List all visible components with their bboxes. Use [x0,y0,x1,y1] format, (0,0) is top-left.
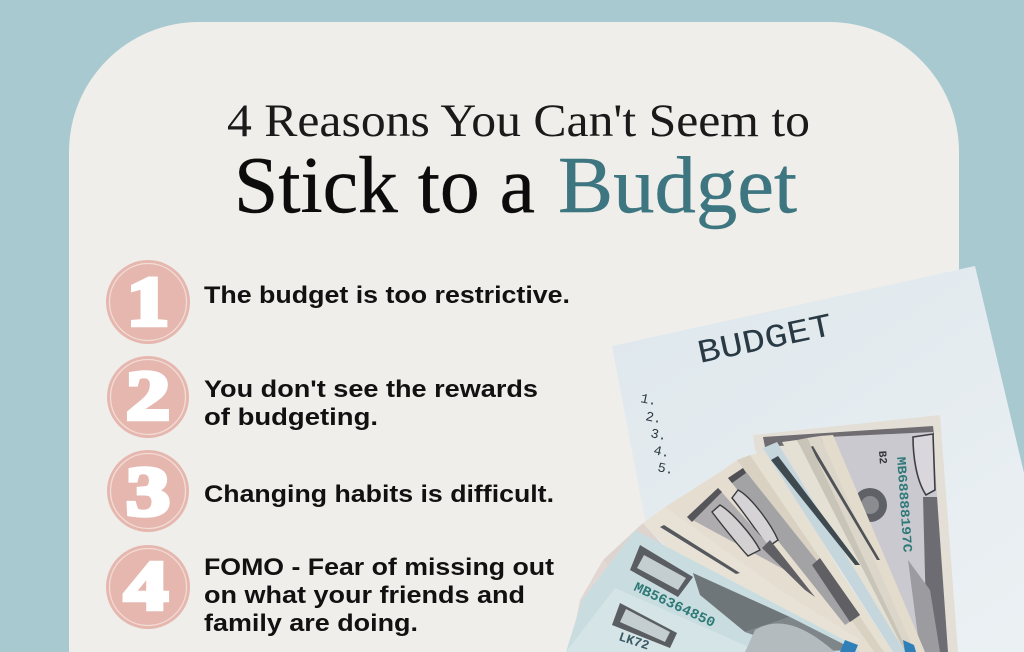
handwritten heading: BUDGET [694,308,836,373]
fifty dollar bill, back [753,415,958,652]
handwritten list: 4. [652,444,671,462]
title: Stick to a [234,142,535,230]
reason 4: on what your friends and [204,582,525,609]
handwritten list [639,392,675,479]
reason 1: The budget is too restrictive. [204,282,570,309]
reason 4 [106,545,554,637]
reason 2 [107,356,538,438]
reason 4: FOMO - Fear of missing out [204,554,554,581]
handwritten list: 1. [639,392,658,410]
reason 4: family are doing. [204,610,418,637]
reason 2: You don't see the rewards [204,376,538,403]
number badge 2: 2 [126,357,170,435]
title: Budget [558,142,797,230]
number badge 4 [106,545,190,629]
hundred dollar bills [566,530,916,652]
number badge 3 [107,450,189,532]
paper sheet [612,266,1024,652]
photo: budget note and cash fan [566,266,1024,652]
serial number: MB68888197C [893,456,915,553]
title: 4 Reasons You Can't Seem to [227,95,810,147]
number badge 4: 4 [124,547,168,625]
number badge 1: 1 [127,263,169,340]
reason 3 [107,450,554,532]
number badge 3: 3 [126,453,170,531]
number badge 2 [107,356,189,438]
handwritten list: 5. [656,461,675,479]
handwritten list: 3. [649,427,668,445]
title [227,95,810,230]
reason 2: of budgeting. [204,404,378,431]
fanned bills [570,435,925,652]
reason 3: Changing habits is difficult. [204,481,554,508]
handwritten list: 2. [644,410,663,428]
fifty dollar bill, back: B2 [875,450,888,464]
reason 1 [106,260,570,344]
number badge 1 [106,260,190,344]
hundred dollar bills: MB56364850 [631,580,717,632]
